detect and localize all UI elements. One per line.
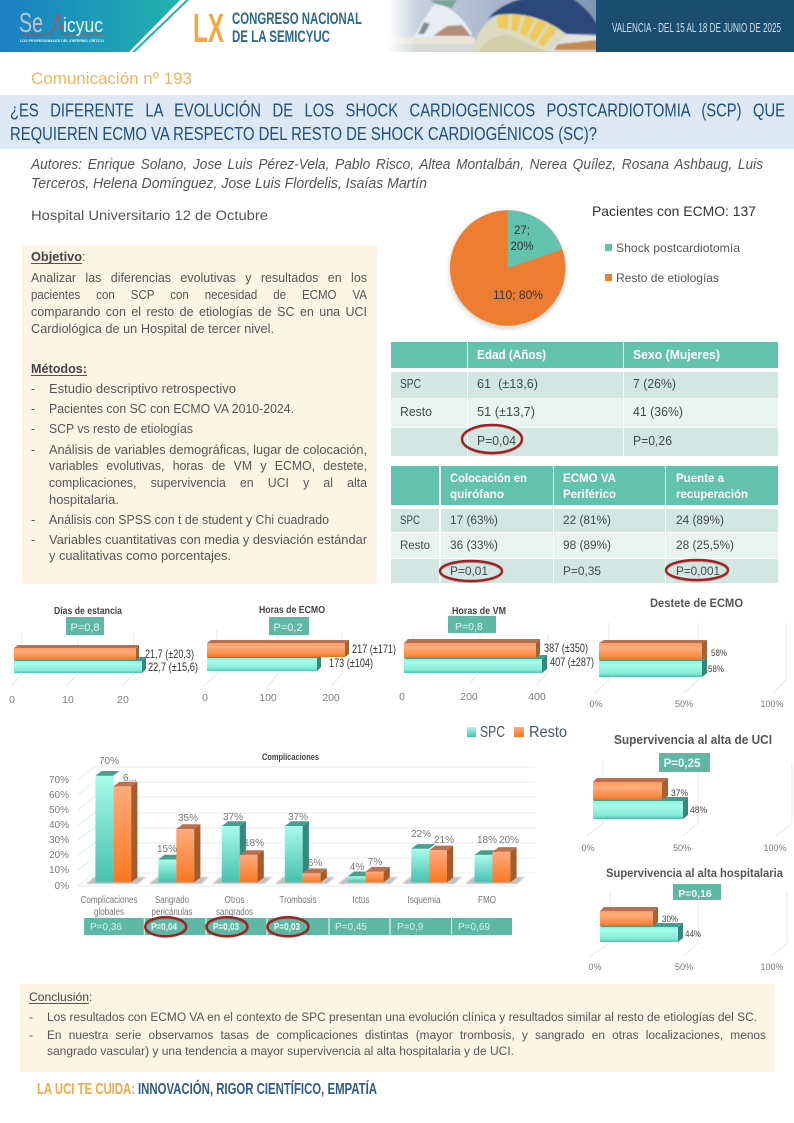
table: edad y sexo	[391, 342, 778, 456]
data labels: 6...	[123, 773, 137, 784]
logo: Semicyuc: LOS PROFESIONALES DEL ENFERMO CRÍTICO	[20, 38, 104, 43]
data labels: 70%	[99, 756, 119, 767]
data labels: 37%	[223, 812, 243, 823]
congress name: CONGRESO NACIONAL	[232, 10, 362, 28]
table: colocación, periférico, puente: 17 (63%)	[450, 515, 498, 527]
métodos list: Análisis de variables demográficas, lugar de colocación,	[49, 443, 367, 457]
conclusión text: sangrado vascular) y una tendencia a mayor supervivencia al alta hospitalaria y de UCI.	[47, 1044, 514, 1058]
category labels: Otros	[224, 895, 244, 906]
data labels	[99, 756, 519, 873]
table: colocación, periférico, puente: P=0,35	[563, 566, 601, 578]
métodos list: -	[31, 513, 35, 527]
data labels: 4%	[350, 862, 364, 873]
title band	[0, 95, 794, 149]
chart: horas de VM: 400	[528, 691, 546, 703]
chart: días de estancia: 0	[9, 694, 15, 706]
legend: SPC / Resto: SPC	[480, 724, 505, 741]
highlight: P=0,03 otros sangrados	[206, 917, 248, 937]
category labels: Isquemia	[408, 895, 441, 906]
chart: supervivencia al alta de UCI	[581, 733, 792, 853]
photo: Valencia architecture	[385, 0, 598, 54]
table: colocación, periférico, puente: Periférico	[563, 489, 616, 501]
chart: supervivencia al alta hospitalaria: 30%	[662, 914, 678, 925]
table: edad y sexo: 51 (±13,7)	[477, 404, 535, 419]
data labels: 6%	[308, 858, 322, 869]
chart: horas de VM: 200	[460, 691, 478, 703]
chart: complicaciones	[49, 752, 535, 937]
category labels: FMO	[478, 895, 496, 906]
category labels: pericánulas	[152, 907, 192, 918]
category labels: Sangrado	[155, 895, 189, 906]
panel: conclusión	[20, 984, 775, 1072]
table: edad y sexo: Edad (Años)	[477, 347, 546, 362]
table: colocación, periférico, puente: 24 (89%)	[676, 515, 724, 527]
data labels: 18%	[477, 835, 497, 846]
table: colocación, periférico, puente: 22 (81%)	[563, 515, 611, 527]
table: colocación, periférico, puente: Puente a	[676, 473, 725, 485]
chart: horas de VM: 407 (±287)	[550, 655, 594, 669]
authors: Autores: Enrique Solano, Jose Luis Pérez-Vela, Pablo Risco, Altea Montalbán, Nerea Quílez, Rosana Ashbaug, Luis	[30, 157, 763, 173]
table: colocación, periférico, puente	[391, 466, 778, 583]
table: colocación, periférico, puente: P=0,001	[676, 566, 720, 578]
table: colocación, periférico, puente: quirófano	[450, 489, 504, 501]
bars: isquemia	[411, 844, 453, 882]
pie legend: Resto de etiologías	[616, 271, 719, 285]
congress name: DE LA SEMICYUC	[232, 28, 330, 46]
communication number: Comunicación nº 193	[31, 69, 192, 88]
métodos list: Pacientes con SC con ECMO VA 2010-2024.	[49, 402, 294, 416]
objetivo text: Analizar las diferencias evolutivas y resultados en los	[31, 271, 367, 285]
chart: días de estancia	[9, 606, 198, 706]
highlight: P=0,001	[666, 560, 728, 581]
pie chart: pacientes con ECMO: 110; 80%	[493, 290, 543, 302]
highlight: P=0,03 trombosis	[268, 917, 308, 937]
chart: supervivencia al alta de UCI: P=0,25	[664, 758, 701, 770]
chart: horas de ECMO: 200	[322, 692, 340, 704]
y axis labels: 50%	[49, 805, 69, 816]
bars: otros sangrados	[222, 821, 264, 882]
objetivo heading: :	[82, 250, 86, 264]
métodos heading: Métodos:	[31, 361, 87, 376]
table: colocación, periférico, puente: Colocación en	[450, 473, 527, 485]
chart: horas de VM: 0	[399, 691, 405, 703]
métodos list: -	[31, 402, 35, 416]
category labels: Trombosis	[280, 895, 316, 906]
pie chart: pacientes con ECMO: 20%	[510, 241, 534, 253]
pie legend: Shock postcardiotomía	[616, 241, 740, 255]
chart: destete de ECMO: 0%	[589, 699, 603, 709]
date band	[596, 0, 794, 52]
conclusión text: -	[29, 1028, 33, 1042]
chart: días de estancia: 20	[117, 694, 129, 706]
métodos list	[31, 382, 367, 563]
bars: FMO	[475, 847, 517, 882]
chart: horas de ECMO: 173 (±104)	[329, 656, 373, 670]
chart: supervivencia al alta de UCI: 50%	[673, 843, 691, 853]
logo band	[0, 0, 189, 52]
objetivo text: pacientes con SCP con necesidad de ECMO VA	[31, 288, 368, 302]
conclusión text: -	[29, 1010, 33, 1024]
congress name: LX	[193, 5, 224, 51]
chart: horas de ECMO: 0	[202, 692, 208, 704]
métodos list: -	[31, 382, 35, 396]
y axis labels: 10%	[49, 865, 69, 876]
chart: destete de ECMO: 50%	[675, 699, 693, 709]
legend: SPC / Resto	[467, 724, 567, 741]
table: edad y sexo: P=0,26	[633, 433, 672, 448]
bars: ictus	[348, 867, 390, 882]
chart: horas de VM	[399, 606, 594, 703]
header banner	[0, 0, 794, 54]
chart: destete de ECMO: 100%	[760, 699, 784, 709]
table: colocación, periférico, puente: 36 (33%)	[450, 540, 498, 552]
table: edad y sexo: 7 (26%)	[633, 376, 676, 391]
highlight: P=0,04	[145, 917, 186, 937]
panel: objetivo y métodos	[22, 245, 377, 584]
p-value strip	[84, 917, 512, 937]
chart: supervivencia al alta de UCI: 0%	[581, 843, 595, 853]
conclusión text: En nuestra serie observamos tasas de complicaciones distintas (mayor trombosis, y sangrado en otras localizaciones, menos	[47, 1028, 766, 1042]
table: colocación, periférico, puente: SPC	[400, 515, 420, 527]
category labels: globales	[94, 907, 124, 918]
table: edad y sexo: Sexo (Mujeres)	[633, 347, 720, 362]
y axis labels	[49, 775, 69, 892]
bars: trombosis	[285, 821, 327, 882]
chart: destete de ECMO: 58%	[708, 664, 724, 675]
chart: días de estancia: 21,7 (±20,3)	[145, 647, 194, 661]
chart: supervivencia al alta hospitalaria	[588, 866, 787, 972]
p-value strip: P=0,69	[458, 922, 490, 933]
objetivo text: comparando con el resto de etiologías de SC en una UCI	[31, 305, 367, 319]
bars: complicaciones globales	[95, 771, 137, 882]
category labels: sangrados	[216, 907, 253, 918]
métodos list: SCP vs resto de etiologías	[49, 422, 193, 436]
métodos list: Variables cuantitativas con media y desviación estándar	[49, 533, 367, 547]
footer slogan: LA UCI TE CUIDA:	[37, 1081, 135, 1098]
data labels: 20%	[499, 835, 519, 846]
table: colocación, periférico, puente: Resto	[400, 540, 430, 552]
chart: supervivencia al alta hospitalaria: Supervivencia al alta hospitalaria	[606, 866, 783, 880]
p-value strip: P=0,36	[90, 922, 122, 933]
table: colocación, periférico, puente: 28 (25,5%)	[676, 540, 734, 552]
y axis labels: 20%	[49, 850, 69, 861]
p-value strip: P=0,9	[397, 922, 424, 933]
chart: días de estancia: 22,7 (±15,6)	[148, 660, 198, 674]
category labels	[80, 895, 496, 918]
p-value strip: P=0,03	[213, 922, 239, 933]
logo: Semicyuc	[19, 7, 104, 43]
chart: días de estancia: 10	[62, 694, 74, 706]
chart: destete de ECMO: Destete de ECMO	[650, 596, 743, 610]
conclusión text	[29, 1010, 766, 1058]
métodos list: -	[31, 422, 35, 436]
bars: sangrado pericánulas	[158, 824, 200, 882]
table: edad y sexo: 41 (36%)	[633, 404, 683, 419]
métodos list: y cualitativas como porcentajes.	[49, 549, 231, 563]
data labels: 15%	[157, 844, 177, 855]
conclusión text: Los resultados con ECMO VA en el contexto de SPC presentan una evolución clínica y resultados similar al resto de etiologías del SC.	[47, 1010, 757, 1024]
chart: destete de ECMO	[589, 596, 786, 709]
title band: REQUIEREN ECMO VA RESPECTO DEL RESTO DE SHOCK CARDIOGÉNICOS (SC)?	[10, 124, 597, 144]
table: edad y sexo: Resto	[400, 404, 432, 419]
chart: destete de ECMO: 58%	[711, 648, 727, 659]
authors	[30, 157, 763, 192]
y axis labels: 70%	[49, 775, 69, 786]
chart: supervivencia al alta hospitalaria: 0%	[588, 962, 602, 972]
y axis labels: 30%	[49, 835, 69, 846]
métodos list: -	[31, 443, 35, 457]
chart: horas de VM: Horas de VM	[452, 606, 506, 617]
objetivo text	[31, 271, 368, 336]
category labels: Complicaciones	[80, 895, 138, 906]
chart: supervivencia al alta hospitalaria: 44%	[685, 929, 701, 940]
data labels: 7%	[368, 857, 382, 868]
métodos list: hospitalaria.	[49, 493, 119, 507]
pie chart: pacientes con ECMO: 27;	[514, 225, 530, 237]
objetivo heading: Objetivo	[31, 249, 82, 264]
chart: horas de VM: P=0,8	[455, 621, 483, 633]
objetivo text: Cardiológica de un Hospital de tercer nivel.	[31, 322, 274, 336]
chart: supervivencia al alta de UCI: 100%	[763, 843, 787, 853]
chart: supervivencia al alta de UCI: 37%	[671, 788, 688, 799]
chart: supervivencia al alta de UCI: Supervivencia al alta de UCI	[614, 733, 772, 747]
chart: horas de ECMO: 217 (±171)	[352, 642, 396, 656]
métodos list: Estudio descriptivo retrospectivo	[49, 382, 236, 396]
table: colocación, periférico, puente: recuperación	[676, 489, 748, 501]
table: edad y sexo: 61 (±13,6)	[477, 376, 538, 391]
logo: Semicyuc: Se	[19, 7, 43, 38]
métodos list: -	[31, 533, 35, 547]
chart: horas de ECMO: 100	[259, 692, 277, 704]
data labels: 21%	[434, 835, 454, 846]
data labels: 37%	[288, 812, 308, 823]
pie heading: Pacientes con ECMO: 137	[592, 203, 756, 219]
chart: días de estancia: P=0,8	[70, 622, 100, 634]
data labels: 35%	[178, 813, 198, 824]
legend: SPC / Resto: Resto	[529, 724, 567, 741]
authors: Terceros, Helena Domínguez, Jose Luis Flordelis, Isaías Martín	[31, 176, 427, 192]
congress name	[193, 5, 362, 51]
y axis labels: 40%	[49, 820, 69, 831]
chart: horas de VM: 387 (±350)	[544, 641, 588, 655]
table: edad y sexo: P=0,04	[477, 433, 516, 448]
floor shadows	[86, 877, 525, 884]
hospital: Hospital Universitario 12 de Octubre	[31, 208, 268, 223]
logo: Semicyuc: icyuc	[63, 15, 103, 37]
highlight: P=0,04	[462, 425, 522, 454]
table: colocación, periférico, puente: 98 (89%)	[563, 540, 611, 552]
chart: supervivencia al alta de UCI: 48%	[690, 805, 707, 816]
métodos list: complicaciones, supervivencia en UCI y al alta	[49, 476, 367, 490]
data labels: 18%	[244, 838, 264, 849]
p-value strip: P=0,04	[151, 922, 177, 933]
chart: supervivencia al alta hospitalaria: 50%	[675, 962, 693, 972]
chart: supervivencia al alta hospitalaria: 100%	[760, 962, 784, 972]
table: colocación, periférico, puente: P=0,01	[450, 566, 488, 578]
y axis labels: 0%	[55, 881, 69, 892]
table: edad y sexo: SPC	[400, 376, 421, 391]
chart: horas de ECMO: P=0,2	[273, 622, 303, 634]
pie legend	[605, 241, 740, 285]
y axis labels: 60%	[49, 790, 69, 801]
chart title: Complicaciones	[262, 752, 319, 763]
conclusión heading: Conclusión	[29, 990, 89, 1004]
data labels: 22%	[411, 829, 431, 840]
chart: supervivencia al alta hospitalaria: P=0,16	[678, 888, 712, 900]
chart: horas de ECMO: Horas de ECMO	[259, 605, 325, 616]
métodos list: Análisis con SPSS con t de student y Chi cuadrado	[49, 513, 329, 527]
p-value strip: P=0,03	[274, 922, 300, 933]
conclusión heading: :	[89, 990, 92, 1004]
category labels: Ictus	[352, 895, 370, 906]
métodos list: variables evolutivas, horas de VM y ECMO, destete,	[49, 459, 367, 473]
highlight: P=0,01	[440, 561, 502, 582]
chart: días de estancia: Días de estancia	[54, 606, 122, 617]
footer slogan	[37, 1079, 377, 1098]
footer slogan: INNOVACIÓN, RIGOR CIENTÍFICO, EMPATÍA	[138, 1079, 377, 1098]
table: colocación, periférico, puente: ECMO VA	[563, 473, 616, 485]
p-value strip: P=0,45	[335, 922, 367, 933]
pie chart: pacientes con ECMO	[449, 210, 567, 329]
chart: horas de ECMO	[202, 605, 396, 704]
